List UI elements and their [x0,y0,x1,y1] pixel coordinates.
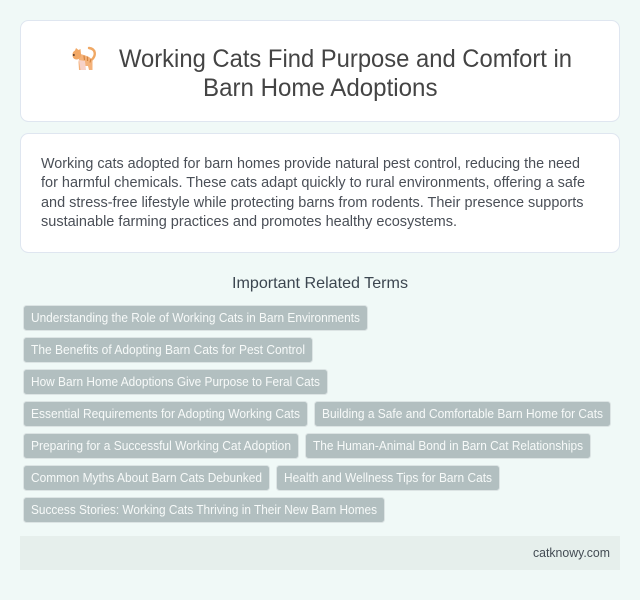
text block: intro paragraph: Working cats adopted for barn homes provide natural pest control, reducing the need [41,156,580,172]
panel: intro text card [20,134,620,252]
tag: give purpose: How Barn Home Adoptions Give Purpose to Feral Cats [31,375,320,389]
tag: understanding the role: Understanding the Role of Working Cats in Barn Environments [31,311,360,325]
text block: intro paragraph: sustainable farming practices and promotes healthy ecosystems. [41,214,457,230]
heading: title [119,45,572,102]
tag: benefits of adopting [24,338,312,362]
text block: intro paragraph: for harmful chemicals. These cats adapt quickly to rural environments, offering a safe [41,175,585,191]
tag: common myths [24,466,270,490]
footer source text: catknowy.com [533,546,610,560]
tag: essential requirements [24,402,308,426]
tag: safe barn home [314,402,610,426]
tag: give purpose [24,370,328,394]
tag: success stories: Success Stories: Working Cats Thriving in Their New Barn Homes [31,503,377,517]
tag: common myths: Common Myths About Barn Cats Debunked [31,471,262,485]
tag: safe barn home: Building a Safe and Comfortable Barn Home for Cats [322,407,603,421]
tag: essential requirements: Essential Requirements for Adopting Working Cats [31,407,300,421]
tag: human-animal bond: The Human-Animal Bond in Barn Cat Relationships [313,439,583,453]
heading: important related terms: Important Related Terms [232,275,408,292]
panel: title card [20,20,620,122]
tag: success stories [24,498,384,522]
footer bar [20,536,620,570]
text block: intro paragraph: and stress-free lifestyle while protecting barns from rodents. Their presence supports [41,195,584,211]
tag: health and wellness: Health and Wellness Tips for Barn Cats [284,471,492,485]
tag: preparing [24,434,298,458]
text block: intro paragraph [41,156,585,230]
tag: benefits of adopting: The Benefits of Adopting Barn Cats for Pest Control [31,343,305,357]
tag: preparing: Preparing for a Successful Working Cat Adoption [31,439,291,453]
tag: human-animal bond [306,434,590,458]
heading: title: Working Cats Find Purpose and Comfort in [119,45,572,73]
tag: understanding the role [24,306,368,330]
icon: orange cat [72,48,95,70]
heading: title: Barn Home Adoptions [203,74,438,102]
tag list: related terms [24,306,610,522]
tag: health and wellness [276,466,500,490]
